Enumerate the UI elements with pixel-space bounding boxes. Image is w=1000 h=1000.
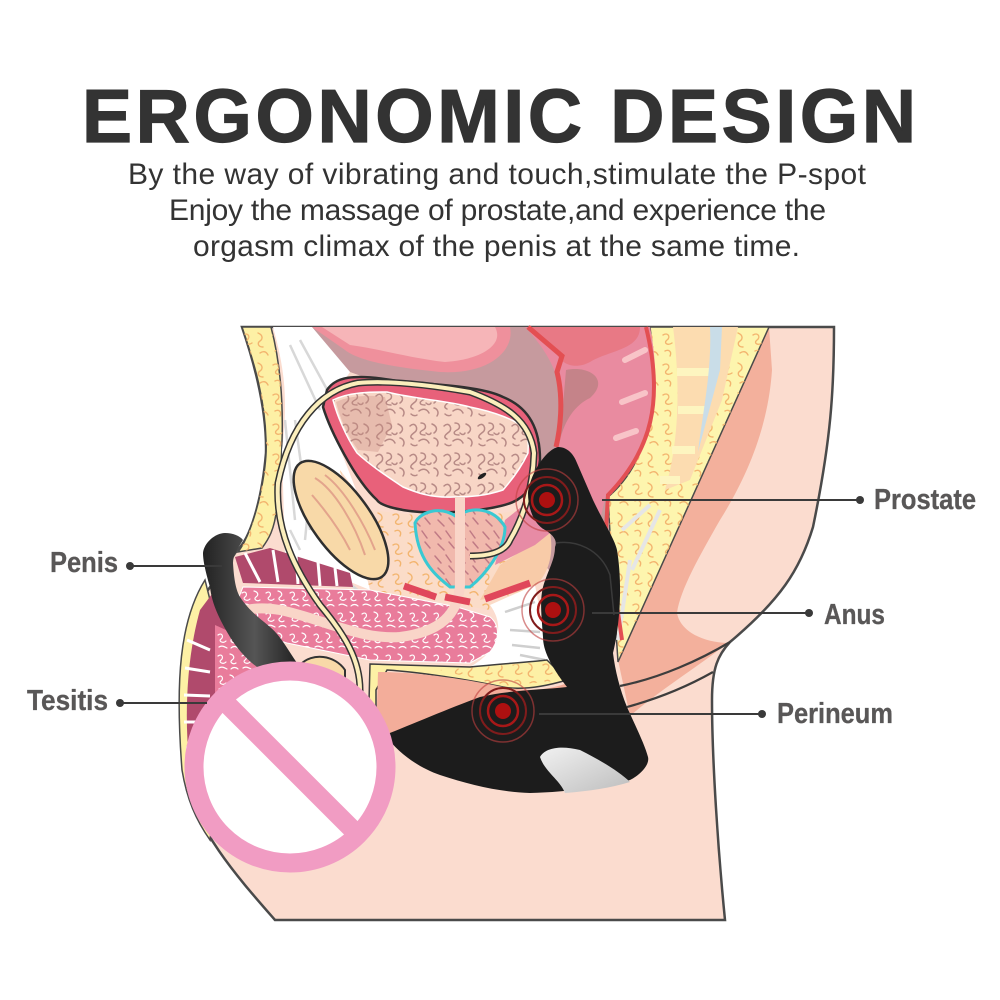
- body skin silhouette: [180, 327, 834, 920]
- product: prostate massager body: [385, 447, 648, 793]
- callout: penis: [50, 547, 222, 579]
- abdominal cavity: [310, 327, 654, 640]
- callout: testis: Tesitis: [27, 685, 108, 717]
- front fat layer: [238, 327, 282, 552]
- fibres lower: [505, 602, 545, 660]
- subtitle text block: orgasm climax of the penis at the same time.: [193, 230, 800, 263]
- back fat layer: [608, 327, 769, 662]
- bladder: [323, 377, 540, 512]
- spine column: [618, 327, 738, 640]
- prostate gland with cyan outline: [415, 510, 505, 587]
- callout: perineum: [539, 698, 893, 730]
- icon: censor prohibition sign: [194, 671, 386, 863]
- subtitle text block: [128, 158, 867, 263]
- vibration marker: prostate: [516, 469, 578, 531]
- vibration marker: perineum: [472, 680, 534, 742]
- pink tissue behind prostate: [495, 500, 560, 565]
- buttock crease lines: [620, 642, 730, 707]
- subtitle text block: Enjoy the massage of prostate,and experience the: [169, 194, 826, 227]
- vibration marker: anus: [522, 579, 584, 641]
- bowel highlight: [322, 327, 497, 362]
- white pelvic floor: [470, 585, 550, 667]
- perineum salmon area: [376, 672, 570, 740]
- connective tissue: [273, 327, 370, 590]
- subtitle text block: By the way of vibrating and touch,stimulate the P-spot: [128, 158, 867, 191]
- testis: [300, 657, 345, 700]
- lower fat band: [368, 660, 567, 740]
- urethral bulb: [404, 583, 530, 602]
- title: ERGONOMIC DESIGN: [82, 74, 916, 158]
- scrotum stripes: [184, 590, 275, 770]
- callout: penis: Penis: [50, 547, 118, 579]
- product: penis ring: [203, 533, 297, 667]
- callout: testis: [27, 685, 207, 717]
- penis shaft: [227, 587, 498, 663]
- pubic bone: [276, 446, 406, 594]
- callout: anus: [592, 599, 885, 631]
- button: [540, 748, 630, 793]
- tissue below bladder: [480, 532, 551, 600]
- buttock salmon band: [618, 327, 772, 716]
- anatomical cross-section diagram: [179, 327, 834, 920]
- vas deferens inner: [278, 382, 534, 735]
- callout: prostate: Prostate: [874, 484, 976, 516]
- penis dark stripes: [235, 548, 353, 587]
- scrotum outer fat: [179, 580, 225, 840]
- callout: prostate: [602, 484, 976, 516]
- bowel top: [312, 327, 511, 372]
- pelvic tissue: [340, 470, 540, 610]
- callout: anus: Anus: [824, 599, 885, 631]
- callout: perineum: Perineum: [777, 698, 893, 730]
- urethra: [217, 497, 460, 640]
- vas deferens tube: [278, 382, 534, 735]
- rectum: [525, 327, 655, 640]
- fibres: [285, 340, 370, 600]
- seam line: [556, 542, 614, 615]
